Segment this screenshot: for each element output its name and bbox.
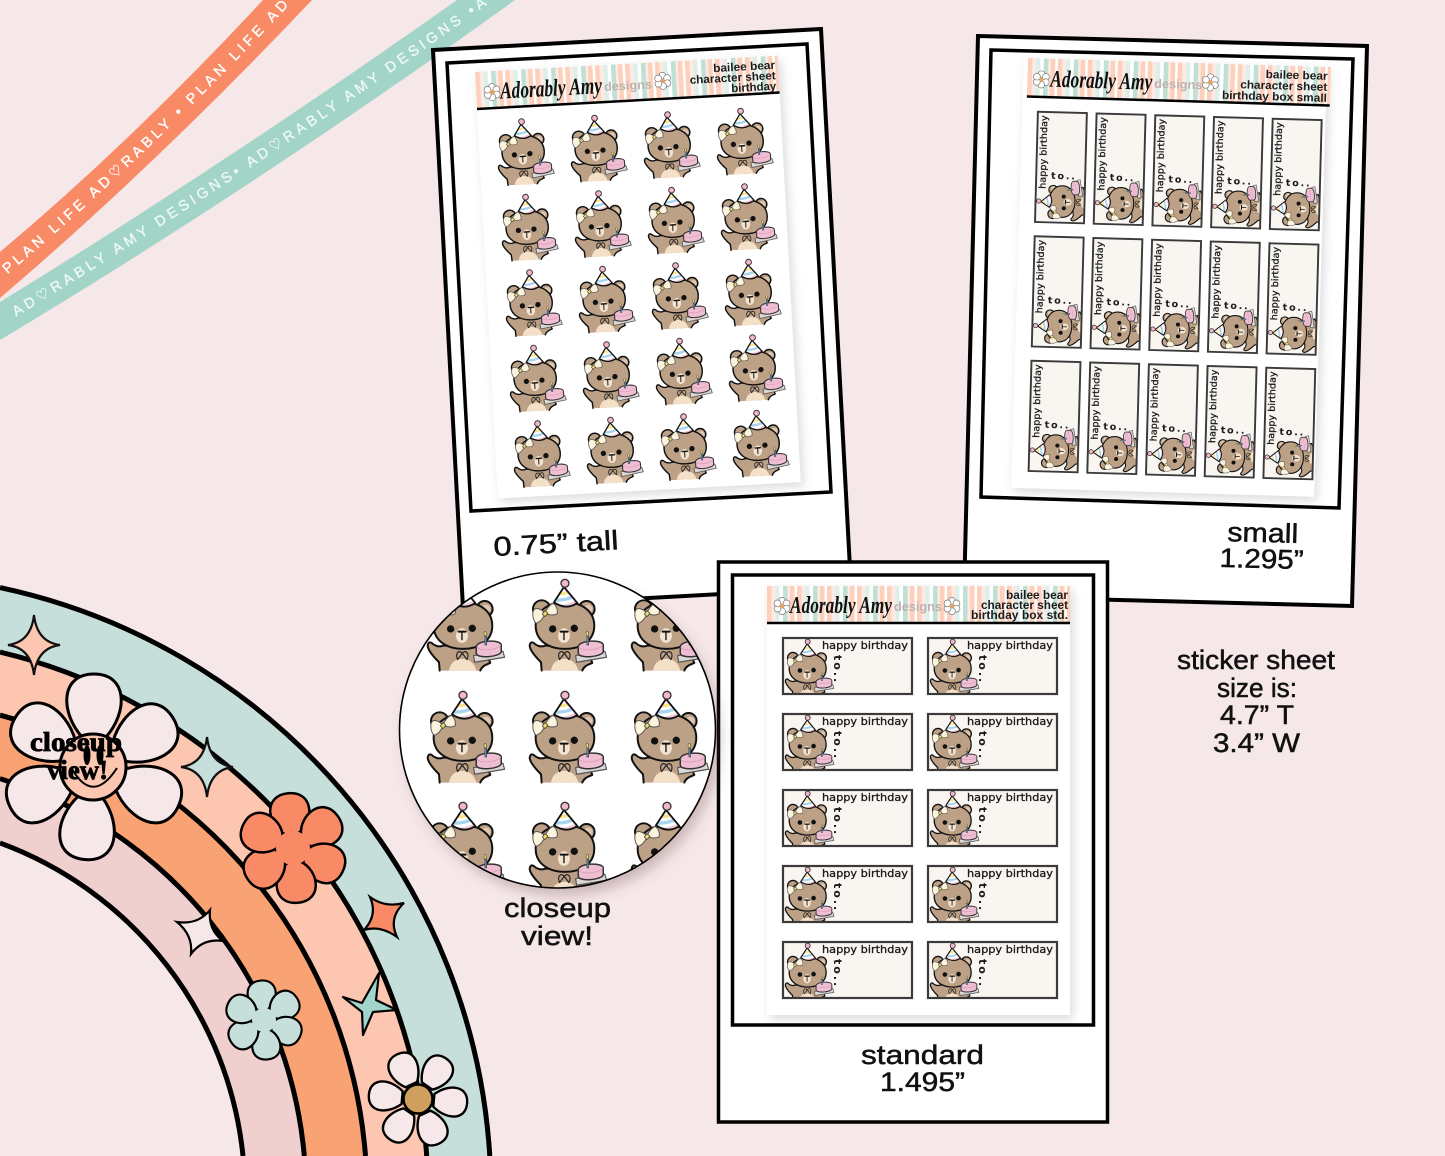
small birthday box stickers: happy birthday [1153,243,1165,317]
icon: white star [177,910,223,954]
size label: standard 1.495: standard [861,1040,984,1070]
standard birthday box stickers: happy birthday [822,944,908,956]
standard birthday box stickers: happy birthday [822,640,908,652]
sticker paper and banner: birthday box small [1222,90,1327,105]
sticker paper and banner: designs [604,77,652,94]
small birthday box stickers: happy birthday [1091,365,1103,440]
caption: closeup view: view! [521,921,593,951]
standard birthday box stickers: to.. [976,883,989,912]
bear sticker grid [496,107,790,488]
small birthday box stickers [1029,112,1324,479]
sticker paper and banner: bailee bear [1265,69,1328,83]
small birthday box stickers: happy birthday [1149,367,1161,441]
small birthday box stickers: happy birthday [1273,122,1285,196]
closeup circle [400,572,716,894]
sticker paper and banner: character sheet [1240,79,1328,94]
sticker paper and banner: birthday [731,81,777,95]
size label: small 1.295: small [1227,517,1299,549]
size label: small 1.295: 1.295” [1219,543,1304,575]
small birthday box stickers: happy birthday [1270,246,1282,320]
standard birthday box stickers: happy birthday [822,792,908,804]
rainbow [0,588,490,1156]
standard birthday box stickers: to.. [831,807,844,836]
sticker paper and banner: Adorably Amy [498,73,603,105]
icon: peach sparkle [8,615,60,675]
sticker paper and banner: Adorably Amy [1049,67,1153,96]
small birthday box stickers: happy birthday [1211,244,1223,319]
small birthday box stickers: happy birthday [1156,118,1168,192]
icon: daisy [368,1048,468,1150]
text block: sticker sheet size: 3.4” W [1213,728,1301,758]
panel: small sticker sheet [964,36,1367,606]
panel: standard sticker sheet [718,562,1108,1122]
standard birthday box stickers: happy birthday [822,716,908,728]
small birthday box stickers: happy birthday [1094,241,1106,315]
standard birthday box stickers: happy birthday [967,792,1053,804]
small birthday box stickers: to.. [1224,301,1250,312]
sticker paper and banner: bailee bear [1006,590,1069,602]
standard birthday box stickers: to.. [831,883,844,912]
sticker paper and banner: Adorably Amy [789,593,892,619]
sticker paper and banner [475,56,801,498]
small birthday box stickers: to.. [1110,173,1135,184]
standard birthday box stickers: happy birthday [822,868,908,880]
sticker paper and banner: bailee bear [713,60,776,75]
standard birthday box stickers: to.. [831,731,844,760]
small birthday box stickers: to.. [1283,302,1308,314]
small birthday box stickers: happy birthday [1267,371,1279,445]
standard birthday box stickers [783,638,1057,1001]
icon: teal sparkle [181,737,233,797]
small birthday box stickers: happy birthday [1208,369,1220,443]
icon: orange flower [235,792,351,904]
icon: teal flower [222,979,306,1061]
small birthday box stickers: to.. [1106,297,1132,309]
standard birthday box stickers: happy birthday [967,868,1053,880]
small birthday box stickers: to.. [1221,425,1246,437]
icon: smiley flower with label: closeup [30,727,122,757]
sticker paper and banner: character sheet [689,70,776,87]
small birthday box stickers: happy birthday [1038,115,1050,189]
small birthday box stickers: to.. [1165,299,1191,310]
sticker paper and banner [767,586,1070,1015]
small birthday box stickers: happy birthday [1097,116,1109,191]
standard birthday box stickers: to.. [976,731,989,760]
icon: smiley flower with label [0,674,190,862]
text block: sticker sheet size [1177,645,1336,758]
small birthday box stickers: happy birthday [1035,239,1047,313]
small birthday box stickers: to.. [1162,423,1188,435]
small birthday box stickers: to.. [1168,174,1194,186]
ribbon: plan life adorably: PLAN LIFE AD♡RABLY • PLAN LIFE AD [2,0,286,274]
panel: 0.75 tall sticker sheet [433,29,851,608]
standard birthday box stickers: happy birthday [967,944,1053,956]
ribbon: adorably amy designs: AD♡RABLY AMY DESIGNS• AD♡RABLY AMY DESIGNS •A [14,0,488,317]
sticker paper and banner [1011,58,1331,497]
standard birthday box stickers: to.. [831,959,844,988]
small birthday box stickers: happy birthday [1215,120,1227,194]
icon: mint star [343,973,397,1035]
small birthday box stickers: to.. [1279,427,1305,438]
caption: closeup view [504,893,611,951]
caption: closeup view: closeup [504,893,611,923]
standard birthday box stickers: happy birthday [967,640,1053,652]
size label: standard 1.495 [861,1040,984,1097]
size label: standard 1.495: 1.495” [880,1067,965,1097]
standard birthday box stickers: happy birthday [967,716,1053,728]
small birthday box stickers: to.. [1045,420,1070,431]
small birthday box stickers: to.. [1286,178,1312,189]
small birthday box stickers: to.. [1103,422,1129,433]
size label: 0.75 tall: 0.75” tall [493,525,619,562]
sticker paper and banner: birthday box std. [971,610,1068,622]
text block: sticker sheet size: sticker sheet [1177,645,1336,675]
sticker paper and banner: character sheet [981,600,1068,612]
text block: sticker sheet size: size is: [1217,673,1297,703]
small birthday box stickers: to.. [1051,171,1077,182]
text block: sticker sheet size: 4.7” T [1220,700,1294,730]
small birthday box stickers: to.. [1227,176,1253,188]
standard birthday box stickers: to.. [831,655,844,684]
standard birthday box stickers: to.. [976,807,989,836]
sticker paper and banner: designs [894,600,942,614]
icon: orange star [364,897,404,937]
icon: smiley flower with label: view! [47,755,108,785]
small birthday box stickers: to.. [1048,295,1074,307]
sticker paper and banner: designs [1154,77,1203,92]
standard birthday box stickers: to.. [976,959,989,988]
standard birthday box stickers: to.. [976,655,989,684]
small birthday box stickers: happy birthday [1032,364,1044,438]
size label: small 1.295 [1219,517,1305,575]
